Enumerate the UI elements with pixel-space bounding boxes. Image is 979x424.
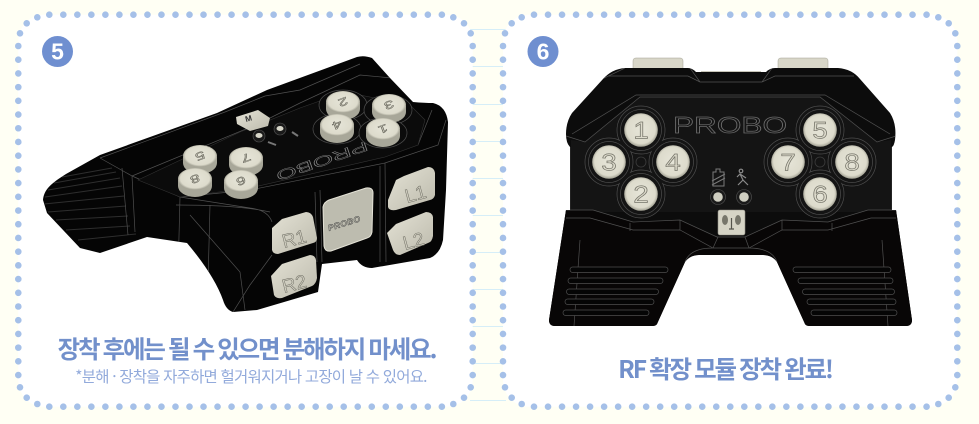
- side key R2: R2: [280, 272, 309, 298]
- step 6 badge: [528, 36, 558, 67]
- button group left: 8: [188, 171, 201, 186]
- controller body: [549, 68, 912, 326]
- side key L2: [387, 212, 433, 255]
- foot ribs: [44, 168, 136, 240]
- background grid lines: [470, 30, 506, 400]
- step 5 badge: [42, 36, 73, 67]
- button group left: 6: [234, 173, 247, 188]
- panel 5 heading: 장착 후에는 될 수 있으면 분해하지 마세요.: [58, 331, 437, 366]
- left button cluster: 3: [601, 150, 617, 176]
- face plate: [571, 97, 891, 212]
- left button cluster: 4: [665, 150, 681, 176]
- right button cluster: [764, 106, 876, 218]
- panel 5 white card: [18, 15, 473, 407]
- controller front view: [549, 58, 912, 326]
- center PROBO key: PROBO: [327, 214, 362, 233]
- mode key: M: [244, 113, 253, 124]
- side key L2: L2: [401, 229, 427, 255]
- icon: running figure: [737, 169, 748, 185]
- status LEDs: [253, 123, 298, 145]
- PROBO logo: PROBO: [673, 112, 787, 138]
- PROBO engraved logo: PROBO: [274, 138, 370, 184]
- status LEDs: [710, 190, 752, 204]
- side key L1: [388, 167, 435, 210]
- panel 6 white card: [503, 15, 957, 407]
- side key R2: [271, 255, 317, 298]
- button group left: 7: [239, 150, 252, 165]
- button group right: 2: [336, 94, 349, 109]
- side key R1: R1: [280, 227, 309, 253]
- button group right: 1: [376, 121, 389, 136]
- foot panel: [549, 210, 912, 326]
- foot ribs: [563, 267, 897, 316]
- icon: battery: [712, 169, 725, 186]
- panel 6 dotted frame: [502, 14, 959, 407]
- top shoulder keys: [633, 58, 828, 76]
- button group right: 4: [330, 117, 343, 132]
- mode key: [236, 110, 270, 131]
- controller body: [43, 56, 448, 312]
- panel 6 heading: RF 확장 모듈 장착 완료!: [618, 351, 832, 386]
- controller isometric view: [43, 56, 448, 312]
- panel 5 dotted frame: [17, 14, 474, 407]
- side key L1: L1: [403, 182, 429, 208]
- button group right: 3: [382, 97, 395, 112]
- center PROBO key: [323, 188, 373, 251]
- right button cluster: 7: [780, 150, 796, 176]
- wireframe edges: [566, 68, 896, 326]
- side key R1: [272, 212, 317, 254]
- panel: step 5: [17, 14, 474, 407]
- RF module key with antenna icon: [718, 210, 745, 235]
- right button cluster: 6: [812, 182, 828, 208]
- left button cluster: 1: [633, 118, 649, 144]
- button group left: [178, 145, 263, 199]
- left button cluster: 2: [633, 182, 649, 208]
- left button cluster: [585, 106, 697, 218]
- panel 5 note: *분해 · 장착을 자주하면 헐거워지거나 고장이 날 수 있어요.: [75, 365, 427, 387]
- step 5 badge: 5: [51, 38, 64, 64]
- button group left: 5: [193, 148, 206, 163]
- right button cluster: 5: [812, 118, 828, 144]
- face plate: [138, 92, 425, 197]
- panel: step 6: [502, 14, 959, 407]
- step 6 badge: 6: [537, 38, 549, 64]
- wireframe edges: [100, 64, 446, 312]
- button group right: [313, 90, 412, 148]
- right button cluster: 8: [844, 150, 860, 176]
